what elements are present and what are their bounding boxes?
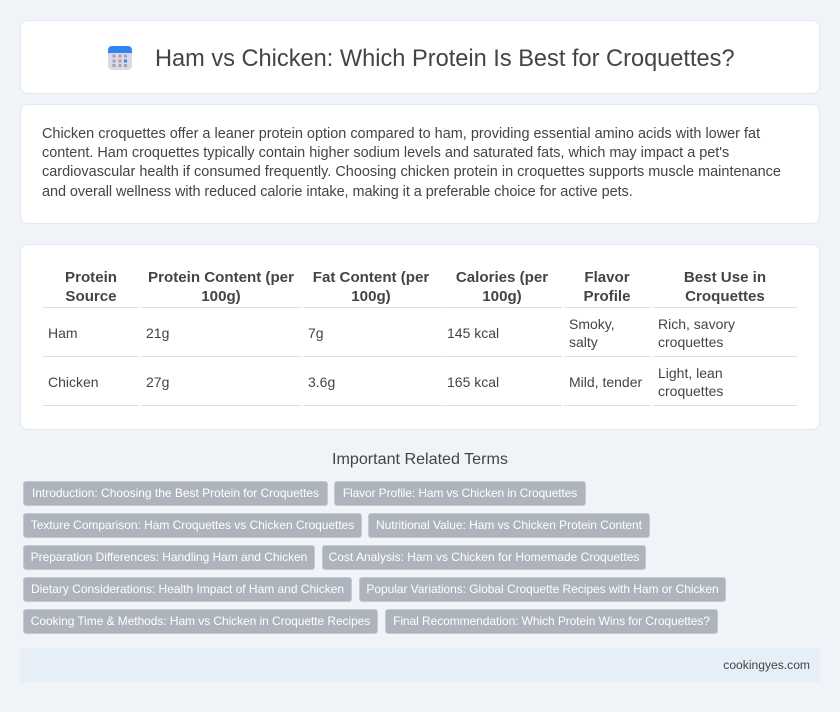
table header row: Flavor xyxy=(584,269,630,286)
related term tags: Nutritional Value: Ham vs Chicken Protein Content xyxy=(376,518,642,532)
table header row: 100g) xyxy=(351,288,391,305)
icon: calendar xyxy=(108,46,132,70)
table row: ham: Rich, savory xyxy=(658,316,735,332)
related term tags: Dietary Considerations: Health Impact of Ham and Chicken xyxy=(31,582,344,596)
table row: chicken: 27g xyxy=(146,374,169,390)
panel: comparison table xyxy=(20,244,820,430)
table row: ham: 145 kcal xyxy=(447,325,499,341)
table header row: Fat Content (per xyxy=(313,269,429,286)
intro paragraph: content. Ham croquettes typically contain higher sodium levels and saturated fats, which may impact a pet's xyxy=(42,145,729,161)
heading: related terms: Important Related Terms xyxy=(332,450,508,468)
table header row: 100g) xyxy=(201,288,241,305)
title: Ham vs Chicken: Which Protein Is Best for Croquettes? xyxy=(155,46,735,72)
related term tags: Flavor Profile: Ham vs Chicken in Croquettes xyxy=(343,486,577,500)
related term tags: Introduction: Choosing the Best Protein for Croquettes xyxy=(32,486,319,500)
table header row: Calories (per xyxy=(456,269,548,286)
related term tags: Cooking Time & Methods: Ham vs Chicken in Croquette Recipes xyxy=(31,614,370,628)
intro paragraph: cardiovascular health if consumed frequently. Choosing chicken protein in croquettes supports muscle maintenance xyxy=(42,164,781,180)
table row: chicken: Light, lean xyxy=(658,365,723,381)
table header row: Best Use in xyxy=(684,269,766,286)
intro paragraph: Chicken croquettes offer a leaner protein option compared to ham, providing essential amino acids with lower fat xyxy=(42,126,760,142)
related term tags: Texture Comparison: Ham Croquettes vs Chicken Croquettes xyxy=(31,518,354,532)
table header row: Profile xyxy=(584,288,630,305)
table header row xyxy=(65,269,766,305)
table header row: Source xyxy=(65,288,117,305)
table row: ham: salty xyxy=(569,334,598,350)
intro paragraph xyxy=(42,126,781,200)
table row: ham: 7g xyxy=(308,325,324,341)
table row: chicken xyxy=(48,365,723,399)
table row: ham: Smoky, xyxy=(569,316,615,332)
table row: chicken: Mild, tender xyxy=(569,374,642,390)
table row: chicken: Chicken xyxy=(48,374,99,390)
panel: title header xyxy=(20,20,820,94)
table row: ham xyxy=(48,316,735,350)
table row: ham: 21g xyxy=(146,325,169,341)
table header row: Protein xyxy=(65,269,117,286)
table row: ham: Ham xyxy=(48,325,78,341)
table header row: Protein Content (per xyxy=(148,269,294,286)
table header row: 100g) xyxy=(482,288,522,305)
related term tags: Cost Analysis: Ham vs Chicken for Homemade Croquettes xyxy=(329,550,639,564)
table row: ham: croquettes xyxy=(658,334,723,350)
related term tags: Final Recommendation: Which Protein Wins for Croquettes? xyxy=(393,614,710,628)
table row: chicken: 3.6g xyxy=(308,374,335,390)
panel: introduction text xyxy=(20,104,820,224)
related term tags: Preparation Differences: Handling Ham and Chicken xyxy=(31,550,307,564)
intro paragraph: and overall wellness with reduced calorie intake, making it a preferable choice for active pets. xyxy=(42,184,633,200)
table row: chicken: croquettes xyxy=(658,383,723,399)
table row: chicken: 165 kcal xyxy=(447,374,499,390)
related term tags: Popular Variations: Global Croquette Recipes with Ham or Chicken xyxy=(366,582,719,596)
footer bar xyxy=(20,648,820,682)
table header row: Croquettes xyxy=(685,288,765,305)
related term tags xyxy=(23,481,726,634)
footer source text: cookingyes.com xyxy=(723,658,810,672)
